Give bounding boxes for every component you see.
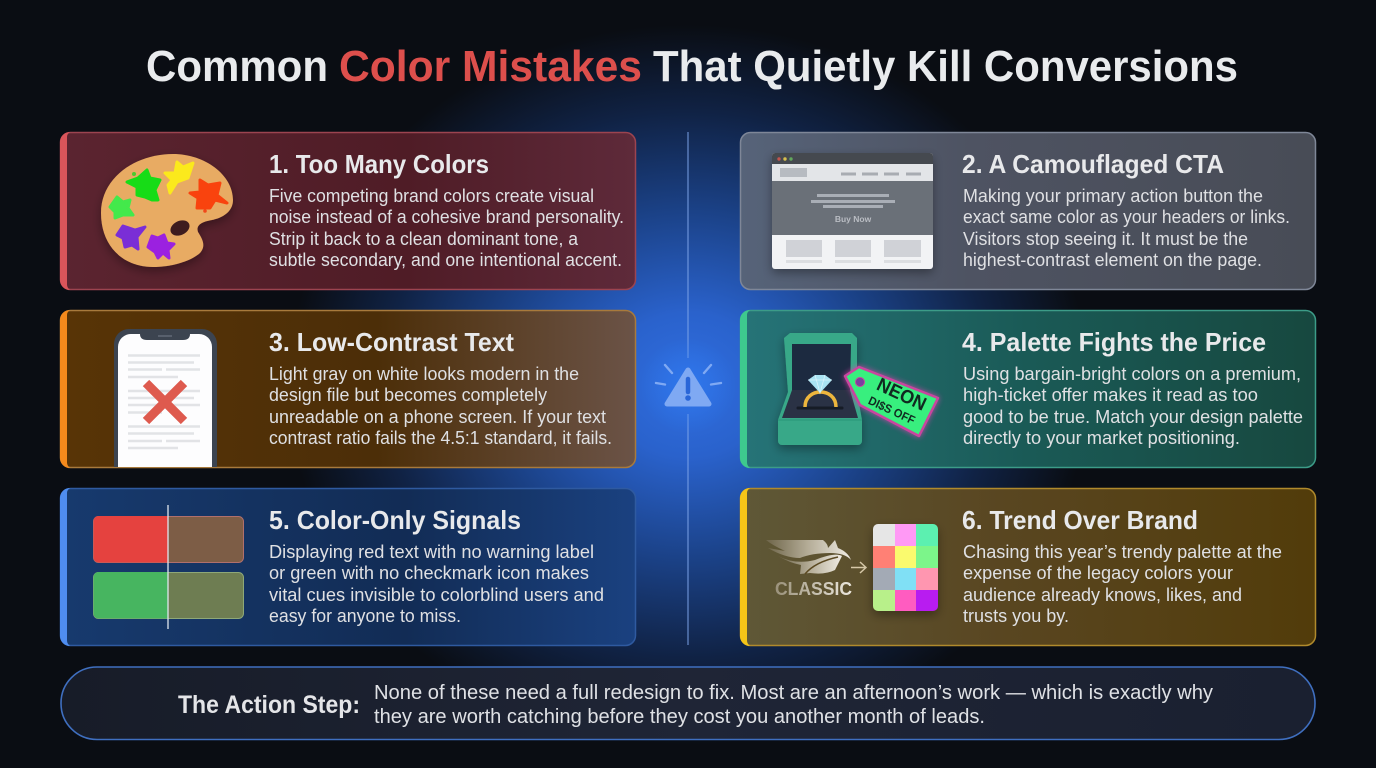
text: color-only signals: Displaying red text with no warning label [269,542,594,562]
callout: the action step [61,667,1315,740]
panel: color-only signals [60,488,636,646]
callout: the action step: The Action Step: [178,691,360,719]
text: trend over brand [962,505,1282,626]
panel: palette fights the price [740,310,1316,468]
text: too many colors: Five competing brand colors create visual [269,186,594,206]
text: low-contrast text: unreadable on a phone screen. If your text [269,407,606,427]
title: That Quietly Kill Conversions [653,42,1238,91]
text: trend over brand: expense of the legacy colors your [963,563,1233,583]
text: color-only signals: easy for anyone to miss. [269,606,461,626]
text: too many colors [269,149,624,270]
text: palette fights the price: good to be true. Match your design palette [963,407,1303,427]
text: camouflaged cta [962,149,1290,270]
text: low-contrast text: contrast ratio fails the 4.5:1 standard, it fails. [269,428,612,448]
icon: browser mockup [772,153,933,269]
text: camouflaged cta: Making your primary action button the [963,186,1263,206]
text: trend over brand: 6. Trend Over Brand [962,505,1198,535]
panel: low-contrast text [60,310,636,468]
text: camouflaged cta: exact same color as your headers or links. [963,207,1290,227]
center divider with alert [640,132,736,645]
icon: phone with x [114,329,217,467]
text: color-only signals: vital cues invisible to colorblind users and [269,585,604,605]
callout: the action step: they are worth catching before they cost you another month of leads. [374,705,985,728]
icon: neon price tag: DI$S OFF [866,393,917,427]
text: palette fights the price: directly to your market positioning. [963,428,1240,448]
panel: trend over brand [740,488,1316,646]
icon: red and green bars [94,505,244,629]
text: low-contrast text: 3. Low-Contrast Text [269,327,514,357]
text: camouflaged cta: Visitors stop seeing it. It must be the [963,229,1248,249]
icon: classic logo: CLASSIC [775,578,852,599]
text: low-contrast text [269,327,612,448]
title: Color Mistakes [339,42,642,91]
panel: camouflaged cta [740,132,1316,290]
text: color-only signals: or green with no checkmark icon makes [269,563,589,583]
text: low-contrast text: design file but becomes completely [269,385,547,405]
text: low-contrast text: Light gray on white looks modern in the [269,364,579,384]
icon: neon price tag: NEON [873,375,929,416]
text: palette fights the price: 4. Palette Fights the Price [962,327,1266,357]
icon: neon price tag [845,367,938,436]
text: trend over brand: Chasing this year’s trendy palette at the [963,542,1282,562]
icon: classic logo [766,540,852,599]
text: too many colors: subtle secondary, and one intentional accent. [269,250,622,270]
icon: warning triangle [656,365,721,404]
title: Common [146,42,328,91]
text: color-only signals [269,505,604,626]
text: palette fights the price [962,327,1303,448]
text: camouflaged cta: highest-contrast element on the page. [963,250,1262,270]
text: trend over brand: audience already knows, likes, and [963,585,1242,605]
text: too many colors: Strip it back to a clean dominant tone, a [269,229,579,249]
title [146,42,1238,91]
text: too many colors: 1. Too Many Colors [269,149,489,179]
callout: the action step: None of these need a full redesign to fix. Most are an afternoon’s work — which is exactly why [374,681,1214,704]
icon: arrow [851,562,866,573]
text: camouflaged cta: 2. A Camouflaged CTA [962,149,1224,179]
icon: ring box [778,333,862,445]
text: too many colors: noise instead of a cohesive brand personality. [269,207,624,227]
icon: paint palette [101,154,233,267]
icon: trendy color grid [873,524,938,611]
text: palette fights the price: high-ticket offer makes it read as too [963,385,1258,405]
icon: browser mockup: Buy Now [835,214,872,224]
text: trend over brand: trusts you by. [963,606,1069,626]
panel: too many colors [60,132,636,290]
text: color-only signals: 5. Color-Only Signals [269,505,521,535]
text: palette fights the price: Using bargain-bright colors on a premium, [963,364,1301,384]
